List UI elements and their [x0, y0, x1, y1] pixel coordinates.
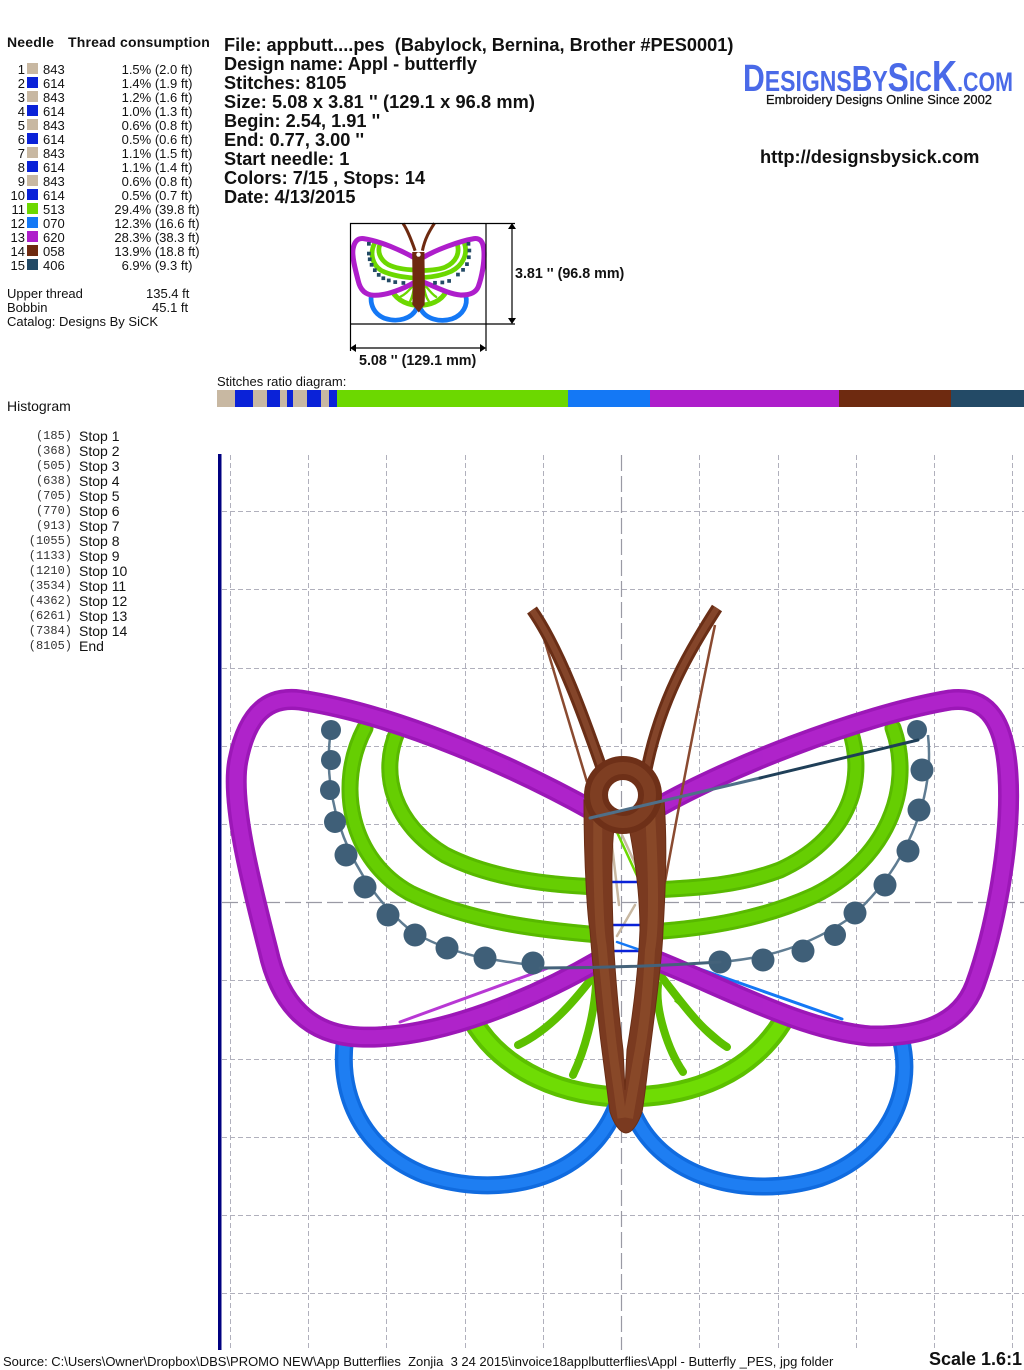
thread row 9: 843 [43, 174, 65, 189]
stop 1: Stop 1 [79, 428, 119, 444]
stop 7: Stop 7 [79, 518, 119, 534]
stop 2 [36, 443, 119, 459]
stop 8: (1055) [29, 534, 72, 548]
upper thread total: Upper thread [7, 286, 83, 301]
histogram heading: Histogram [7, 398, 71, 414]
stop 14: (7384) [29, 624, 72, 638]
stop 14: Stop 14 [79, 623, 127, 639]
thread row 7: 843 [43, 146, 65, 161]
stop 13: Stop 13 [79, 608, 127, 624]
lower green arc and spokes [468, 975, 788, 1097]
thread row 15: 6.9% (9.3 ft) [122, 258, 192, 273]
stop 11: Stop 11 [79, 578, 126, 594]
histogram stop list [29, 428, 127, 654]
upper thread total [7, 286, 190, 301]
brown antennae threads [543, 625, 715, 882]
thread row 11: 513 [43, 202, 65, 217]
thread row 3: 1.2% (1.6 ft) [122, 90, 192, 105]
design info text block: End: 0.77, 3.00 '' [224, 130, 364, 150]
thread row 8 [18, 160, 192, 175]
stop 5: (705) [36, 489, 72, 503]
stop 5 [36, 488, 119, 504]
thread row 5: 843 [43, 118, 65, 133]
thread row 1: 1 [18, 62, 25, 77]
stop 8 [29, 533, 119, 549]
thread row 1: 1.5% (2.0 ft) [122, 62, 192, 77]
end: (8105) [29, 639, 72, 653]
design info text block: Begin: 2.54, 1.91 '' [224, 111, 380, 131]
purple upper wings [236, 699, 1009, 1037]
thread row 11 [12, 202, 200, 217]
thread row 8: 8 [18, 160, 25, 175]
thread row 2: 614 [43, 76, 65, 91]
bounding box and dimension lines [350, 224, 515, 351]
thread row 12: 12.3% (16.6 ft) [114, 216, 200, 231]
centre lines [222, 455, 1024, 1350]
thread row 3: 3 [18, 90, 25, 105]
loose connecting threads behind the body [608, 820, 642, 951]
thread row 10 [11, 188, 192, 203]
thread row 11: 11 [12, 202, 25, 217]
design info text block: Date: 4/13/2015 [224, 187, 355, 207]
design info text block: Design name: Appl - butterfly [224, 54, 477, 74]
stop 13 [29, 608, 127, 624]
thin blue and purple jump stitches [400, 968, 842, 1022]
end [29, 638, 104, 654]
thread row 12: 070 [43, 216, 65, 231]
thread row 10: 614 [43, 188, 65, 203]
end: End [79, 638, 104, 654]
slate dotted wing edges [320, 720, 934, 974]
thread row 15: 15 [11, 258, 25, 273]
stop 8: Stop 8 [79, 533, 119, 549]
thread row 9 [18, 174, 192, 189]
thread row 8: 614 [43, 160, 65, 175]
thread row 7: 7 [18, 146, 25, 161]
stop 10 [29, 563, 127, 579]
thread row 1 [18, 62, 192, 77]
stop 6 [36, 503, 119, 519]
thumbnail butterfly [353, 223, 484, 320]
thread row 11: 29.4% (39.8 ft) [114, 202, 200, 217]
butterfly body and antennae [532, 608, 717, 1133]
thread row 13: 13 [11, 230, 25, 245]
thread row 5: 0.6% (0.8 ft) [122, 118, 192, 133]
scale label: Scale 1.6:1 [929, 1349, 1022, 1369]
design info text block [224, 35, 733, 207]
stop 11: (3534) [29, 579, 72, 593]
stop 5: Stop 5 [79, 488, 119, 504]
stop 4: (638) [36, 474, 72, 488]
design info text block: Colors: 7/15 , Stops: 14 [224, 168, 425, 188]
thread row 13: 28.3% (38.3 ft) [114, 230, 200, 245]
thread row 10: 0.5% (0.7 ft) [122, 188, 192, 203]
stop 7 [36, 518, 119, 534]
stop 7: (913) [36, 519, 72, 533]
design info text block: Size: 5.08 x 3.81 '' (129.1 x 96.8 mm) [224, 92, 535, 112]
stop 12 [29, 593, 127, 609]
thread row 14: 13.9% (18.8 ft) [114, 244, 200, 259]
thread row 4: 1.0% (1.3 ft) [122, 104, 192, 119]
thread row 12: 12 [11, 216, 25, 231]
stop 3: (505) [36, 459, 72, 473]
dimension arrowheads [350, 223, 516, 352]
thread row 2: 2 [18, 76, 25, 91]
design info text block: File: appbutt....pes (Babylock, Bernina, Brother #PES0001) [224, 35, 733, 55]
stop 10: Stop 10 [79, 563, 127, 579]
stop 9: (1133) [29, 549, 72, 563]
stop 3 [36, 458, 119, 474]
stop 9: Stop 9 [79, 548, 119, 564]
thread row 12 [11, 216, 200, 231]
thread row 4: 4 [18, 104, 25, 119]
stop 13: (6261) [29, 609, 72, 623]
bobbin total: 45.1 ft [152, 300, 188, 315]
size thumbnail with dimensions [350, 222, 625, 369]
grid [222, 455, 1024, 1350]
logo: DesignsBySick.com: Embroidery Designs Online Since 2002 [766, 93, 992, 107]
logo: DesignsBySick.com: DESIGNSBYSICK.COM [743, 52, 1013, 101]
bobbin total [7, 300, 188, 315]
source path footer: Source: C:\Users\Owner\Dropbox\DBS\PROMO NEW\App Butterflies Zonjia 3 24 2015\invoice18applbutterflies\Appl - Butterfly _PES, jpg folder [3, 1354, 833, 1369]
stop 9 [29, 548, 119, 564]
thread row 2 [18, 76, 192, 91]
thread row 6 [18, 132, 192, 147]
thread row 3: 843 [43, 90, 65, 105]
thread row 13: 620 [43, 230, 65, 245]
thread row 1: 843 [43, 62, 65, 77]
upper thread total: 135.4 ft [146, 286, 189, 301]
bobbin total: Bobbin [7, 300, 47, 315]
table header: needle: Needle [7, 34, 54, 50]
main stitch preview [218, 454, 1024, 1350]
thread row 14: 058 [43, 244, 65, 259]
website url: http://designsbysick.com [760, 146, 979, 167]
stitches ratio label: Stitches ratio diagram: [217, 374, 346, 389]
thread row 15: 406 [43, 258, 65, 273]
stop 4: Stop 4 [79, 473, 119, 489]
thread row 5: 5 [18, 118, 25, 133]
thread row 9: 0.6% (0.8 ft) [122, 174, 192, 189]
stop 4 [36, 473, 120, 489]
stop 6: (770) [36, 504, 72, 518]
stop 6: Stop 6 [79, 503, 119, 519]
thread row 7: 1.1% (1.5 ft) [122, 146, 192, 161]
thread row 15 [11, 258, 192, 273]
thread table panel [7, 34, 210, 329]
slate jump stitches across the body [540, 740, 918, 968]
thread row 7 [18, 146, 192, 161]
thread row 6: 614 [43, 132, 65, 147]
stop 11 [29, 578, 126, 594]
thread row 2: 1.4% (1.9 ft) [122, 76, 192, 91]
thread row 14 [11, 244, 200, 259]
thread row 13 [11, 230, 200, 245]
thread row 9: 9 [18, 174, 25, 189]
thread row 8: 1.1% (1.4 ft) [122, 160, 192, 175]
blue lower wings [344, 1040, 904, 1187]
stop 12: Stop 12 [79, 593, 127, 609]
stop 10: (1210) [29, 564, 72, 578]
stitches ratio bar [217, 390, 1024, 407]
thread row 10: 10 [11, 188, 25, 203]
left hoop edge [218, 454, 222, 1350]
thread row 14: 14 [11, 244, 25, 259]
design info text block: Stitches: 8105 [224, 73, 346, 93]
stop 1: (185) [36, 429, 72, 443]
stop 1 [36, 428, 119, 444]
stop 2: Stop 2 [79, 443, 119, 459]
thread row 6: 6 [18, 132, 25, 147]
design info text block: Start needle: 1 [224, 149, 349, 169]
stop 2: (368) [36, 444, 72, 458]
stop 12: (4362) [29, 594, 72, 608]
thread row 4: 614 [43, 104, 65, 119]
thread row 6: 0.5% (0.6 ft) [122, 132, 192, 147]
thread row 4 [18, 104, 192, 119]
green wing arcs [350, 728, 900, 935]
thread row 3 [18, 90, 192, 105]
thread row 5 [18, 118, 192, 133]
height label: 3.81 '' (96.8 mm) [515, 266, 625, 282]
catalog line: Catalog: Designs By SiCK [7, 314, 158, 329]
width label: 5.08 '' (129.1 mm) [359, 353, 477, 369]
stop 3: Stop 3 [79, 458, 119, 474]
stop 14 [29, 623, 127, 639]
table header: thread consumption: Thread consumption [68, 34, 210, 50]
